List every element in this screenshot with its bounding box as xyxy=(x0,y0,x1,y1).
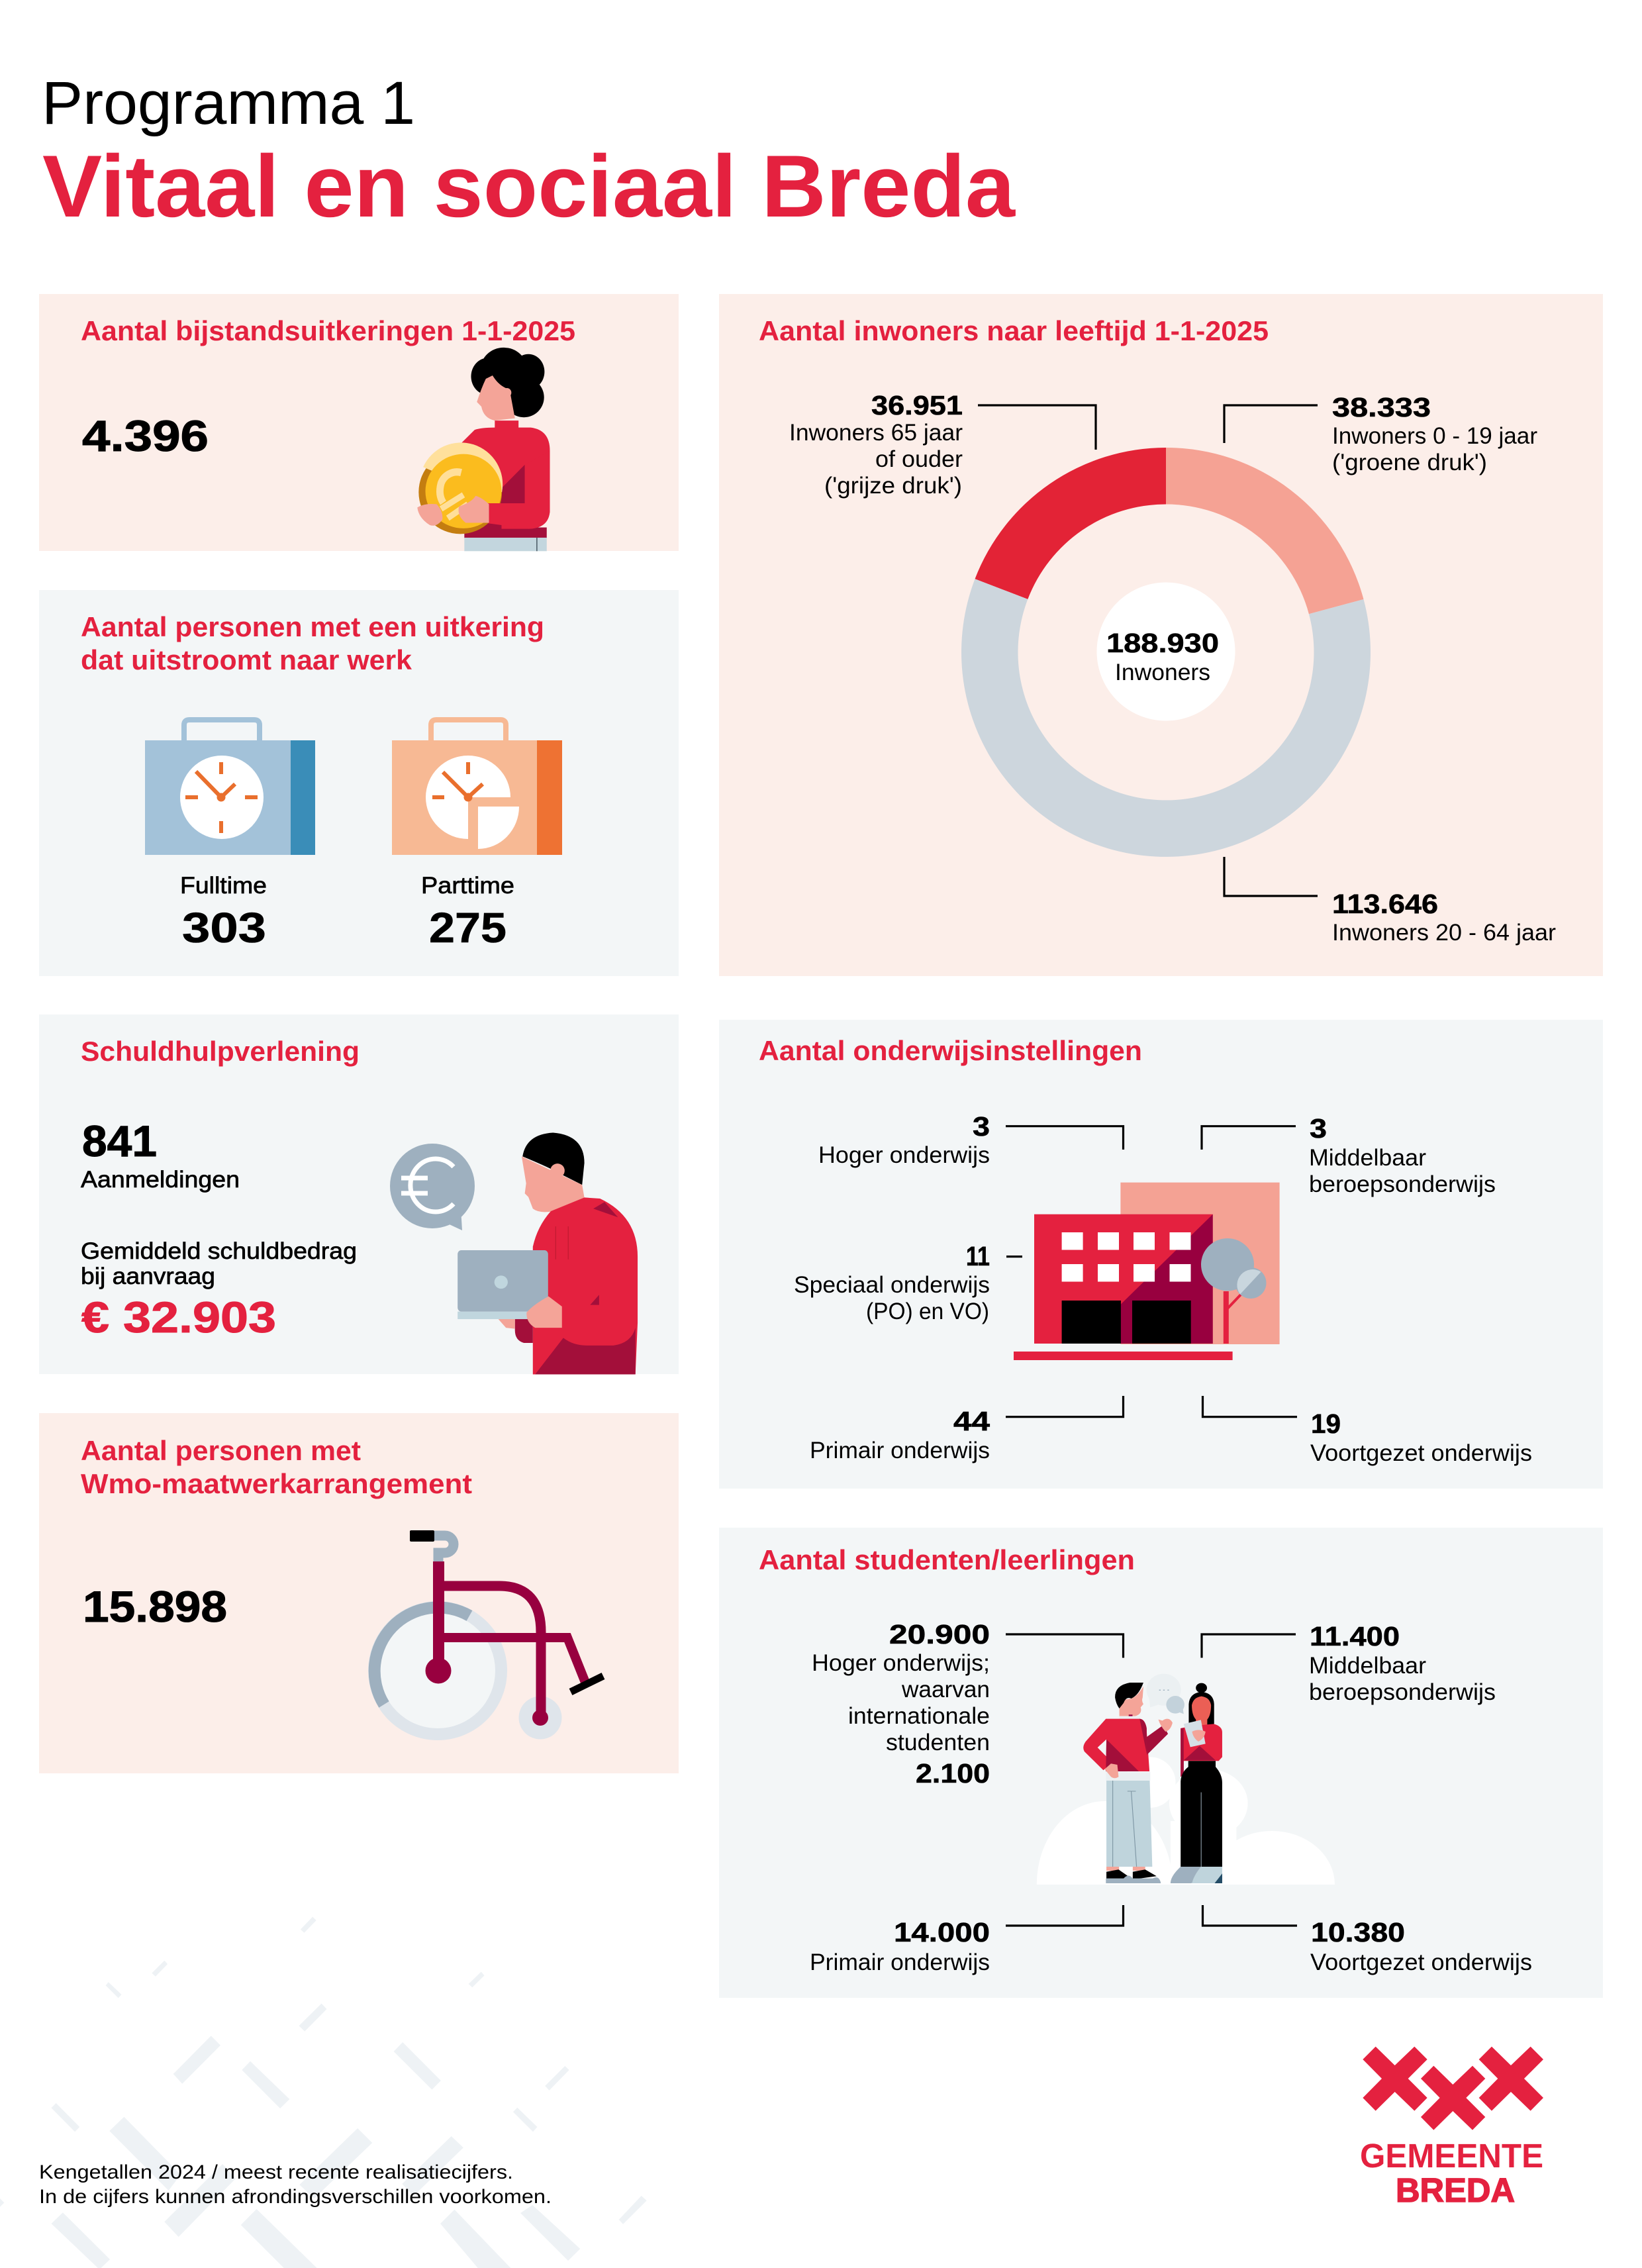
heading: Aantal personen met xyxy=(81,1435,361,1466)
callout: middelbaar beroepsonderwijs: 11.400 xyxy=(1310,1621,1400,1652)
callout: hoger onderwijs: 20.900 xyxy=(889,1619,990,1650)
callout: voortgezet onderwijs xyxy=(1202,1905,1532,1975)
panel: onderwijsinstellingen xyxy=(719,1020,1603,1489)
heading: Aantal bijstandsuitkeringen 1-1-2025 xyxy=(81,315,575,346)
callout: hoger onderwijs xyxy=(818,1111,1123,1168)
callout: middelbaar beroepsonderwijs: beroepsonderwijs xyxy=(1309,1171,1496,1197)
callout: speciaal onderwijs: (PO) en VO) xyxy=(866,1299,989,1324)
callout: voortgezet onderwijs: Voortgezet onderwijs xyxy=(1310,1440,1532,1466)
callout: primair onderwijs: 44 xyxy=(953,1406,990,1436)
icon: parttime briefcase xyxy=(392,720,562,855)
heading: dat uitstroomt naar werk xyxy=(81,644,412,675)
callout: primair onderwijs: 14.000 xyxy=(894,1917,990,1948)
illustration: two people talking xyxy=(1037,1674,1335,1885)
callout: hoger onderwijs: Hoger onderwijs xyxy=(818,1142,990,1168)
panel: Wmo-maatwerkarrangement xyxy=(39,1413,679,1773)
callout: middelbaar beroepsonderwijs xyxy=(1202,1621,1496,1705)
footnote: In de cijfers kunnen afrondingsverschillen voorkomen. xyxy=(39,2186,552,2208)
heading xyxy=(81,611,544,675)
icon: wheelchair xyxy=(368,1530,603,1740)
donut chart xyxy=(961,448,1371,857)
aanmeldingen xyxy=(81,1116,240,1193)
illustration: school building xyxy=(1014,1183,1280,1360)
gemiddeld schuldbedrag: bij aanvraag xyxy=(81,1263,215,1289)
aanmeldingen: 841 xyxy=(82,1116,157,1165)
panel: bijstandsuitkeringen xyxy=(39,294,679,551)
number: 4.396 xyxy=(82,411,209,460)
callout: hoger onderwijs: Hoger onderwijs; xyxy=(812,1650,990,1676)
number: 15.898 xyxy=(83,1582,227,1631)
callout: primair onderwijs xyxy=(810,1905,1123,1975)
callout: hoger onderwijs: studenten xyxy=(886,1730,990,1755)
callout: 20 - 64 jaar: Inwoners 20 - 64 jaar xyxy=(1332,920,1556,946)
icon: euro speech bubble xyxy=(390,1144,475,1230)
callout: hoger onderwijs: 2.100 xyxy=(916,1758,990,1789)
callout: hoger onderwijs xyxy=(812,1619,1123,1789)
callout: hoger onderwijs: 3 xyxy=(973,1111,990,1142)
callout: middelbaar beroepsonderwijs: beroepsonderwijs xyxy=(1309,1679,1496,1705)
callout: primair onderwijs: Primair onderwijs xyxy=(810,1949,990,1975)
callout: 65 jaar of ouder: Inwoners 65 jaar xyxy=(789,420,963,446)
label: fulltime xyxy=(180,873,267,952)
heading: Schuldhulpverlening xyxy=(81,1036,360,1067)
title: Programma 1 xyxy=(42,70,415,137)
callout: 0 - 19 jaar: Inwoners 0 - 19 jaar xyxy=(1332,423,1537,449)
label: parttime: Parttime xyxy=(421,873,514,899)
callout: voortgezet onderwijs: 19 xyxy=(1311,1408,1341,1439)
logo: Gemeente Breda: BREDA xyxy=(1396,2171,1515,2209)
callout: voortgezet onderwijs xyxy=(1202,1396,1532,1466)
panel: schuldhulpverlening xyxy=(39,1014,679,1375)
heading: Aantal studenten/leerlingen xyxy=(759,1544,1135,1575)
aanmeldingen: Aanmeldingen xyxy=(81,1167,240,1193)
logo: Gemeente Breda xyxy=(1360,2047,1543,2209)
callout: 65 jaar of ouder: 36.951 xyxy=(871,390,963,420)
total: 188.930 xyxy=(1106,628,1219,658)
callout: 65 jaar of ouder xyxy=(789,390,1096,499)
title xyxy=(42,70,1016,236)
label: fulltime: Fulltime xyxy=(180,873,267,899)
footnote: Kengetallen 2024 / meest recente realisatiecijfers. xyxy=(39,2161,513,2183)
label: fulltime: 303 xyxy=(182,904,266,952)
callout: voortgezet onderwijs: 10.380 xyxy=(1311,1917,1405,1948)
callout: hoger onderwijs: waarvan xyxy=(901,1677,990,1702)
callout: primair onderwijs xyxy=(810,1396,1123,1463)
callout: middelbaar beroepsonderwijs xyxy=(1202,1113,1496,1197)
footnote xyxy=(39,2161,552,2208)
callout: middelbaar beroepsonderwijs: Middelbaar xyxy=(1309,1145,1426,1171)
callout: 65 jaar of ouder: of ouder xyxy=(875,446,963,472)
callout: 65 jaar of ouder: ('grijze druk') xyxy=(824,473,962,499)
gemiddeld schuldbedrag xyxy=(81,1238,357,1342)
callout: hoger onderwijs: internationale xyxy=(848,1703,990,1729)
callout: 0 - 19 jaar xyxy=(1224,392,1537,475)
callout: speciaal onderwijs: 11 xyxy=(966,1241,990,1271)
label: parttime: 275 xyxy=(429,904,507,952)
callout: 20 - 64 jaar xyxy=(1224,857,1556,946)
gemiddeld schuldbedrag: € 32.903 xyxy=(81,1293,276,1342)
heading: Aantal personen met een uitkering xyxy=(81,611,544,642)
callout: 0 - 19 jaar: ('groene druk') xyxy=(1332,450,1487,475)
callout: speciaal onderwijs xyxy=(794,1241,1022,1324)
total: Inwoners xyxy=(1115,660,1210,685)
icon: fulltime briefcase xyxy=(145,720,315,855)
panel: studenten/leerlingen xyxy=(719,1528,1603,1998)
illustration: woman with coin xyxy=(417,348,550,551)
callout: speciaal onderwijs: Speciaal onderwijs xyxy=(794,1272,990,1298)
panel: uitstroom naar werk xyxy=(39,590,679,976)
heading: Aantal inwoners naar leeftijd 1-1-2025 xyxy=(759,315,1269,346)
total xyxy=(1106,628,1219,685)
callout: 0 - 19 jaar: 38.333 xyxy=(1332,392,1431,422)
heading: Aantal onderwijsinstellingen xyxy=(759,1035,1142,1066)
heading xyxy=(81,1435,472,1499)
logo: Gemeente Breda: GEMEENTE xyxy=(1360,2137,1543,2175)
callout: middelbaar beroepsonderwijs: Middelbaar xyxy=(1309,1653,1426,1679)
panel: inwoners naar leeftijd xyxy=(719,294,1603,976)
heading: Wmo-maatwerkarrangement xyxy=(81,1468,472,1499)
callout: 20 - 64 jaar: 113.646 xyxy=(1332,889,1438,919)
gemiddeld schuldbedrag: Gemiddeld schuldbedrag xyxy=(81,1238,357,1264)
callout: middelbaar beroepsonderwijs: 3 xyxy=(1310,1113,1327,1144)
label: parttime xyxy=(421,873,514,952)
illustration: man with laptop xyxy=(458,1132,638,1375)
title: Vitaal en sociaal Breda xyxy=(42,138,1016,236)
callout: primair onderwijs: Primair onderwijs xyxy=(810,1438,990,1463)
callout: voortgezet onderwijs: Voortgezet onderwijs xyxy=(1310,1949,1532,1975)
